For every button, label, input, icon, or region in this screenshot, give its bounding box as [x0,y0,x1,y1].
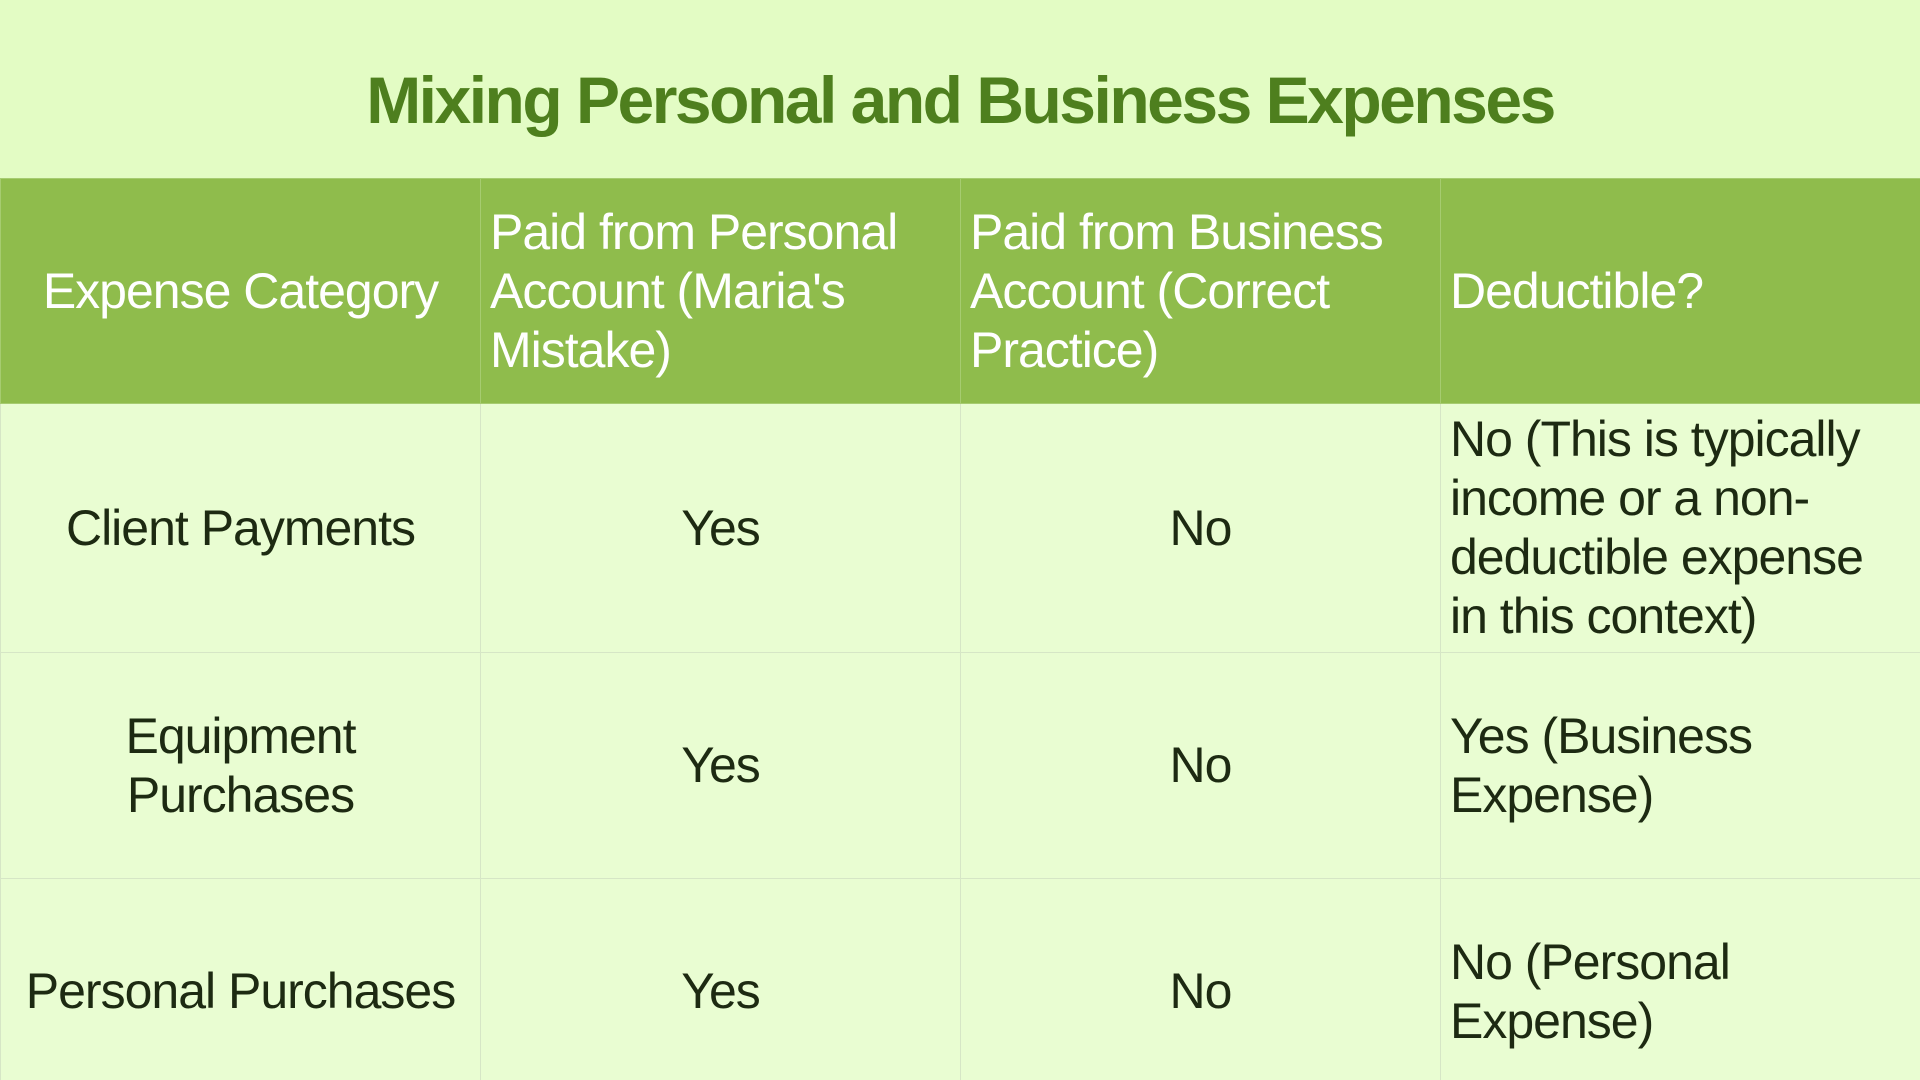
row: personal purchases: Expense) [1450,993,1653,1049]
row: personal purchases: No (Personal [1450,934,1730,990]
row: equipment purchases [1,653,1920,878]
title: Mixing Personal and Business Expenses [366,63,1554,137]
row: client payments: Yes [681,500,760,556]
row: client payments: in this context) [1450,588,1756,644]
header row: Deductible? [1450,262,1703,318]
header row: Account (Correct [970,262,1329,318]
row: client payments: deductible expense [1450,529,1863,585]
row: client payments: No [1170,500,1231,556]
row: client payments: income or a non- [1450,470,1809,526]
row: personal purchases: Personal Purchases [26,963,455,1019]
header row: Paid from Personal [490,204,897,260]
row: equipment purchases: Purchases [127,766,354,822]
row: personal purchases [1,879,1920,1080]
row: equipment purchases: Yes [681,737,760,793]
row: equipment purchases: Equipment [125,708,356,764]
row: equipment purchases: Yes (Business [1450,708,1752,764]
row: client payments [1,404,1920,652]
header row: Practice) [970,322,1158,378]
header row: Account (Maria's [490,262,845,318]
row: personal purchases: No [1170,963,1231,1019]
row: equipment purchases: No [1170,737,1231,793]
header row: Mistake) [490,322,671,378]
row: equipment purchases: Expense) [1450,766,1653,822]
row: client payments: Client Payments [66,500,415,556]
header row: Expense Category [43,262,438,318]
row: personal purchases: Yes [681,963,760,1019]
row: client payments: No (This is typically [1450,411,1860,467]
header row: Paid from Business [970,204,1383,260]
